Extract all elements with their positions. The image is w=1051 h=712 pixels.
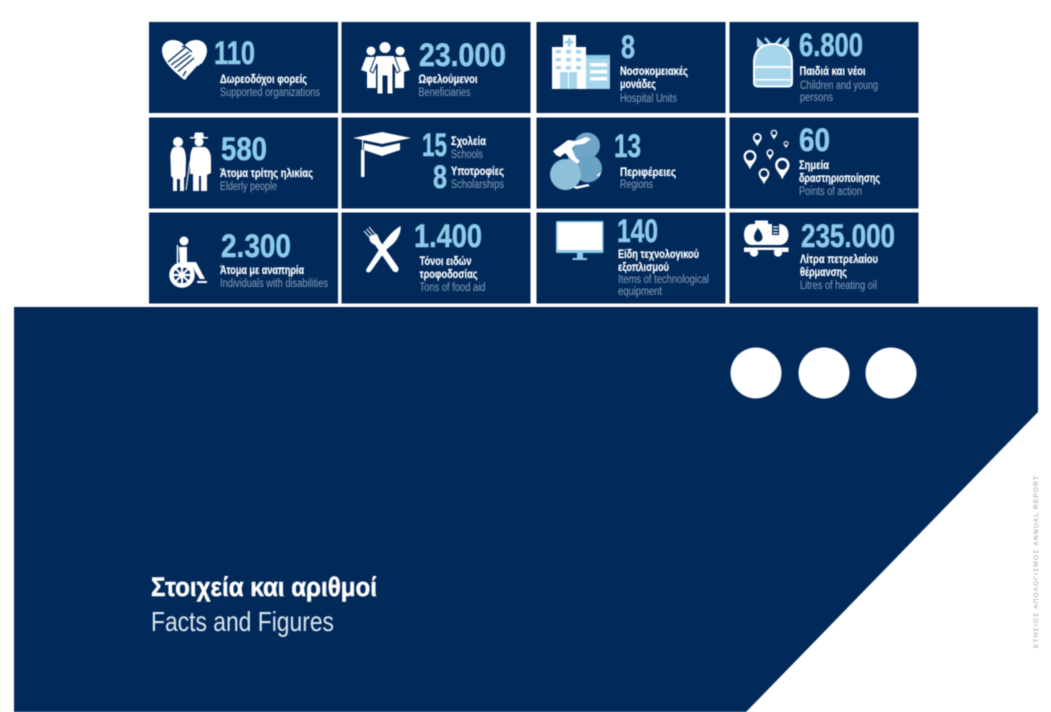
panel: elderly people: Elderly people [220,181,277,193]
icon: computer monitor [556,221,604,260]
panel: technological equipment: equipment [618,286,663,298]
panel: children and young persons [730,22,918,113]
icon: graduation cap [353,132,411,177]
panel: supported organizations: Supported organizations [220,87,320,99]
panel: schools and scholarships: Σχολεία [451,136,486,148]
panel: elderly people [149,118,338,208]
vertical report label: ΕΤΗΣΙΟΣ ΑΠΟΛΟΓΙΣΜΟΣ ANNUAL REPORT [1033,476,1040,648]
panel: regions: Regions [620,179,653,191]
title: Facts and Figures [151,606,334,637]
panel: schools and scholarships: Schools [451,149,483,161]
panel: children and young persons: 6.800 [799,27,863,63]
icon: wheelchair [172,236,207,286]
panel: points of action [730,118,918,208]
panel: litres of heating oil: Λίτρα πετρελαίου [800,254,878,266]
panel: schools and scholarships: Υποτροφίες [451,166,504,178]
icon: group of people [361,42,410,94]
panel: beneficiaries: Beneficiaries [418,87,471,99]
panel: elderly people: 580 [221,131,267,167]
panel: tons of food aid [342,212,530,304]
panel: schools and scholarships: Scholarships [451,179,504,191]
panel: schools and scholarships: 15 [422,127,447,163]
panel: litres of heating oil: 235.000 [801,218,895,254]
panel: supported organizations: Δωρεοδόχοι φορείς [220,74,307,86]
panel: beneficiaries: 23.000 [419,37,506,73]
panel: hospital units: Hospital Units [620,93,677,105]
panel: tons of food aid: τροφοδοσίας [420,269,478,281]
panel: regions: Περιφέρειες [620,167,676,179]
panel: points of action: Points of action [799,186,862,198]
panel: individuals with disabilities: Individuals with disabilities [220,278,328,290]
panel: beneficiaries: Ωφελούμενοι [418,74,478,86]
panel: individuals with disabilities: 2.300 [221,228,291,264]
panel: tons of food aid: 1.400 [414,218,482,254]
panel: points of action: 60 [799,122,830,158]
icon: fork and knife [364,226,401,272]
panel: elderly people: Άτομα τρίτης ηλικίας [220,168,313,180]
panel: technological equipment: Είδη τεχνολογικού [618,249,699,261]
icon: location pins [744,130,790,184]
panel: technological equipment: Items of technological [618,274,709,286]
panel: hospital units: 8 [621,29,635,65]
panel: hospital units [536,22,726,113]
panel: individuals with disabilities: Άτομα με αναπηρία [220,265,304,277]
panel: children and young persons: Παιδιά και νέοι [800,66,866,78]
panel: individuals with disabilities [149,212,338,304]
panel: main navy background [14,307,1038,712]
panel: children and young persons: persons [800,92,833,104]
panel: hospital units: Νοσοκομειακές [620,66,688,78]
panel: schools and scholarships: 8 [433,159,447,195]
panel: litres of heating oil: θέρμανσης [800,267,847,279]
icon: elderly couple [170,132,211,191]
icon: oil tank wagon [744,220,788,257]
icon: map of Greece [550,132,602,190]
icon: backpack [754,37,792,86]
panel: regions [536,118,726,208]
panel: technological equipment: εξοπλισμού [618,262,669,274]
panel: regions: 13 [614,128,641,164]
panel: litres of heating oil [730,212,918,304]
panel: children and young persons: Children and young [800,80,878,92]
panel: hospital units: μονάδες [620,79,656,91]
panel: schools and scholarships [342,118,530,208]
panel: supported organizations: 110 [214,35,255,71]
icon: handshake heart [162,40,207,80]
title [151,572,377,637]
title: Στοιχεία και αριθμοί [151,572,377,602]
panel: tons of food aid: Tons of food aid [420,282,486,294]
panel: tons of food aid: Τόνοι ειδών [420,256,472,268]
panel: points of action: Σημεία [799,160,829,172]
panel: technological equipment [536,212,726,304]
panel: beneficiaries [342,22,530,113]
panel: litres of heating oil: Litres of heating oil [800,280,877,292]
icon: hospital [552,35,610,89]
three white circles [730,348,916,398]
panel: technological equipment: 140 [617,213,658,249]
panel: supported organizations [149,22,338,113]
panel: points of action: δραστηριοποίησης [799,173,880,185]
